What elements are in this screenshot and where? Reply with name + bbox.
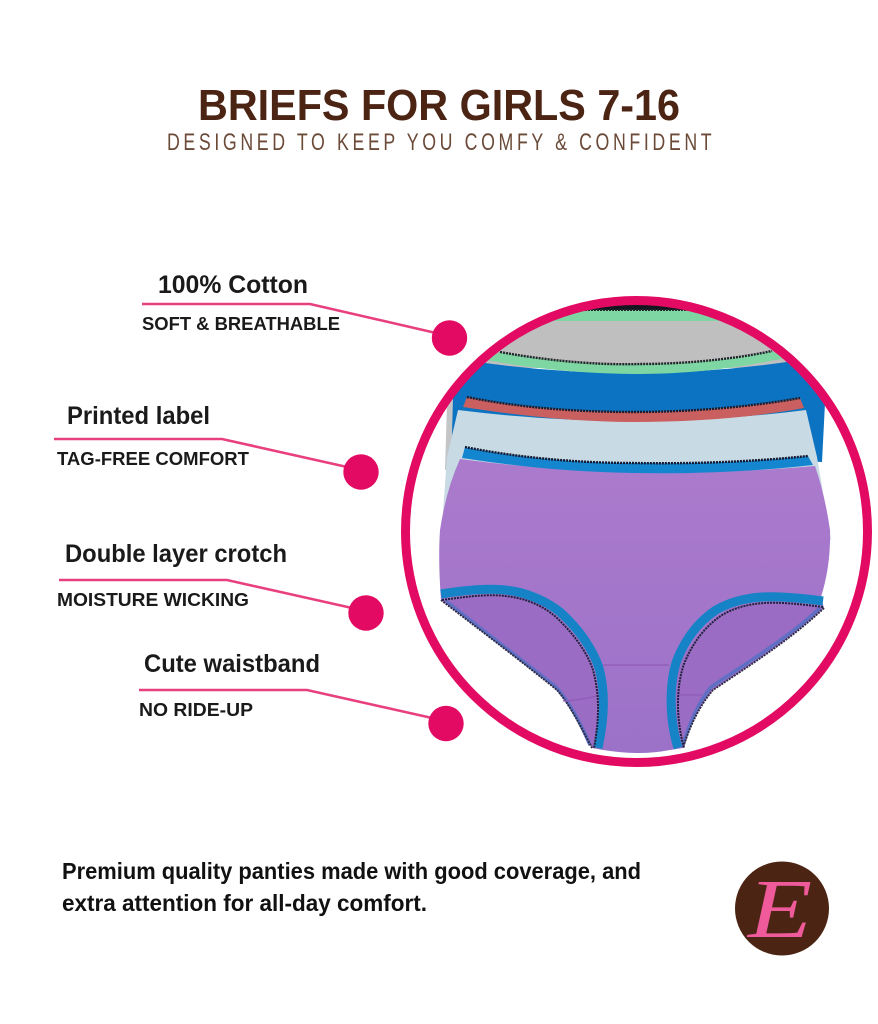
closing statement [62,858,641,916]
gray side edge [445,398,453,470]
closing statement: Premium quality panties made with good coverage, and [62,858,641,884]
pink ring [406,300,868,762]
waistband blue [462,447,813,473]
callout: 100% cotton: 100% Cotton [158,271,308,299]
callout: printed label: TAG-FREE COMFORT [57,449,249,469]
crotch seams [603,664,669,666]
left leg lining edge [446,601,590,745]
callout: double layer crotch: MOISTURE WICKING [57,590,249,610]
callout: 100% cotton: SOFT & BREATHABLE [142,314,340,334]
purple front brief body [439,459,830,753]
callout: cute waistband: Cute waistband [144,650,320,678]
callout: printed label [54,402,379,490]
callout: double layer crotch: Double layer crotch [65,540,287,568]
black back band [590,305,684,310]
callout: cute waistband [139,650,464,741]
logo badge [735,862,829,956]
callout: printed label: Printed label [67,402,210,430]
right leg band [671,597,823,748]
white-blue brief [441,397,831,540]
right leg lining edge [683,608,820,745]
title: BRIEFS FOR GIRLS 7-16 [198,81,680,130]
logo badge: E [746,862,812,956]
left leg band [441,589,603,748]
product photo: stacked briefs in circle [406,300,868,762]
subtitle: DESIGNED TO KEEP YOU COMFY & CONFIDENT [167,130,712,156]
gray brief [470,310,800,368]
right leg inner panel [678,602,822,717]
left leg inner panel [444,594,593,688]
blue brief with green band [450,351,825,462]
closing statement: extra attention for all-day comfort. [62,890,427,916]
callout: double layer crotch [57,540,384,631]
callout: 100% cotton [142,271,467,356]
callout: cute waistband: NO RIDE-UP [139,700,253,720]
